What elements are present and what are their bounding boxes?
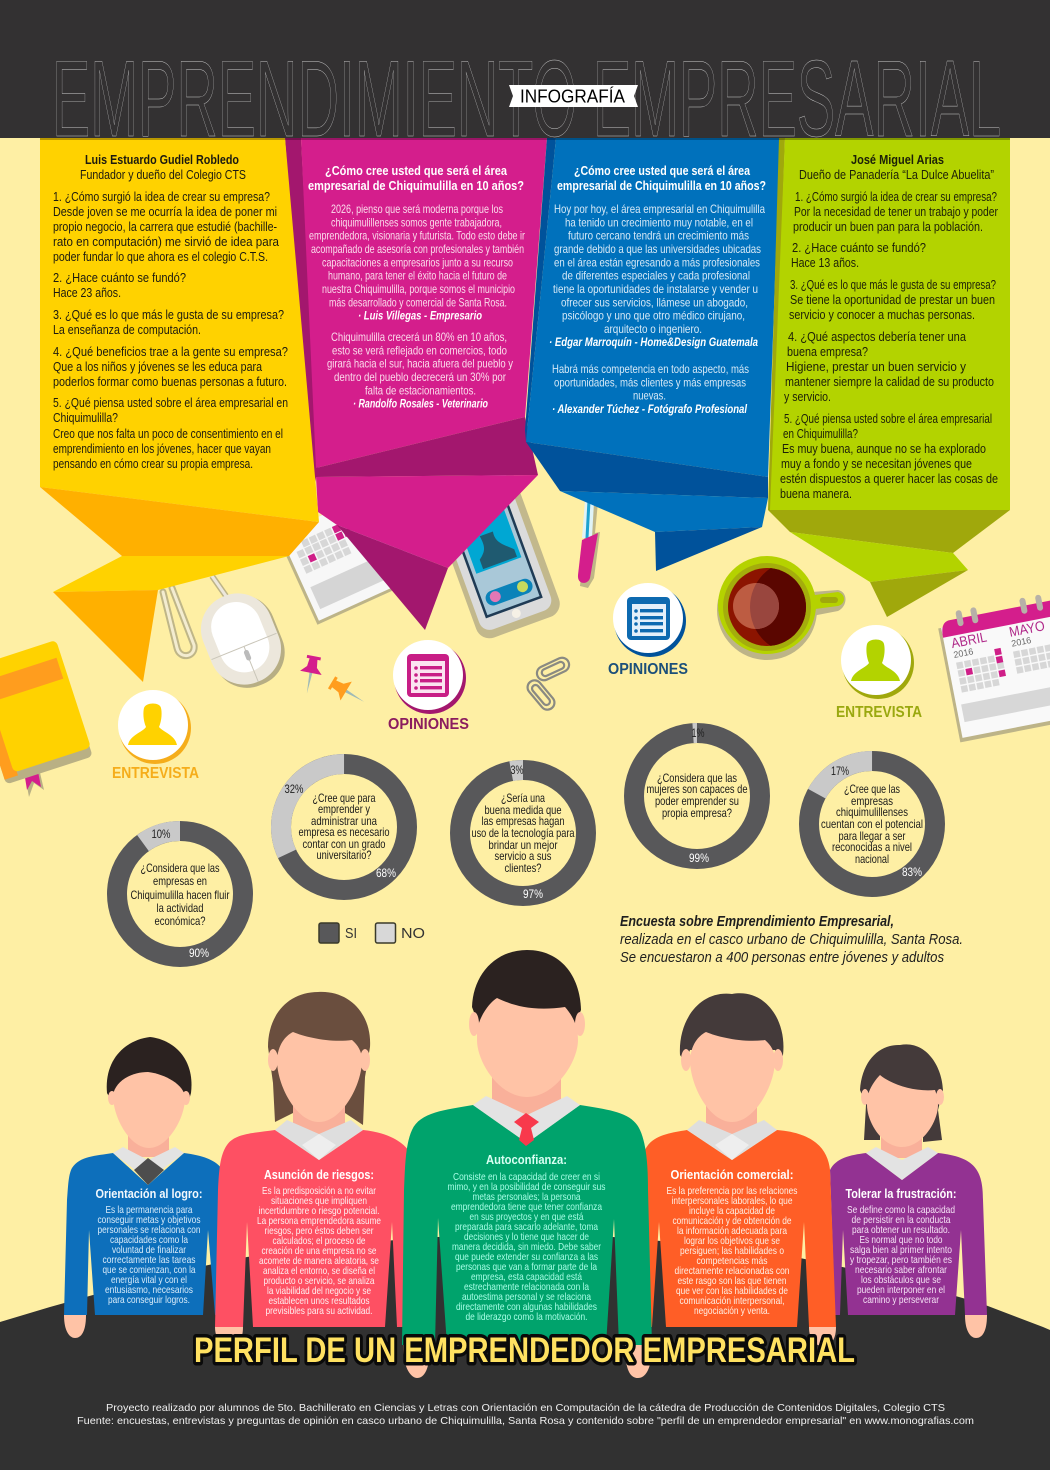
text: magenta opinions: ¿Cómo cree usted que será el área <box>325 163 508 178</box>
text: autoconfianza: estrechamente relacionada con la <box>464 1281 589 1293</box>
text: autoconfianza: en sus proyectos y en que está <box>470 1211 584 1223</box>
text: orientación comercial: competencias más <box>696 1255 768 1267</box>
text: tolerar la frustración: Se define como la capacidad <box>847 1204 955 1216</box>
text: orientación al logro: entusiasmo, necesarios <box>105 1284 193 1296</box>
donut chart: actividad económica: 90% <box>189 946 209 960</box>
text: magenta opinions: nuestra Chiquimulilla, porque somos el municipio <box>322 282 515 296</box>
text: autoconfianza: de liderazgo como la motivación. <box>466 1311 588 1323</box>
text: yellow interview: 3. ¿Qué es lo que más le gusta de su empresa? <box>53 308 284 322</box>
text: asunción de riesgos: La persona emprendedora asume <box>257 1215 381 1227</box>
text: green interview: muy a fondo y se necesitan jóvenes que <box>781 457 972 471</box>
icon: orange pin <box>326 673 370 711</box>
person: purple, tolerar la frustración <box>830 1044 987 1338</box>
donut chart: tecnología: buena medida que <box>484 803 562 817</box>
text: yellow interview: poderlos formar como buenas personas a futuro. <box>53 375 287 389</box>
text: magenta opinions: emprendedora, visionaria y futurista. Todo esto debe ir <box>309 229 525 243</box>
label: entrevista yellow: ENTREVISTA <box>112 765 199 782</box>
donut chart: actividad económica: económica? <box>154 914 206 928</box>
text: magenta opinions: girará hacia el sur, hacia afuera del pueblo y <box>327 357 513 371</box>
icon: notebook <box>0 640 94 797</box>
label: ABRIL: ABRIL <box>950 628 988 651</box>
icon: mouse <box>190 576 295 699</box>
donut chart: empresas chiquimulillenses: para llegar a ser <box>838 829 906 843</box>
text: green interview: 5. ¿Qué piensa usted sobre el área empresarial <box>784 412 992 426</box>
icon: opiniones magenta <box>388 640 469 733</box>
donut chart: grado universitario: universitario? <box>316 848 372 862</box>
donut chart: tecnología: clientes? <box>504 861 542 875</box>
icon: paperclips <box>525 655 571 713</box>
icon: pen <box>578 500 600 588</box>
donut chart: actividad económica: la actividad <box>156 901 204 915</box>
text: green interview: servicio y conocer a muchas personas. <box>789 308 975 322</box>
text: tolerar la frustración: necesario saber afrontar <box>855 1264 947 1276</box>
label: year: 2016 <box>953 646 974 660</box>
text: blue opinions <box>549 163 766 416</box>
text: tolerar la frustración: Es normal que no todo <box>860 1234 943 1246</box>
text: magenta opinions: empresarial de Chiquimulilla en 10 años? <box>308 178 524 193</box>
text: autoconfianza: metas personales; la persona <box>472 1191 581 1203</box>
footer credits: Fuente: encuestas, entrevistas y preguntas de opinión en casco urbano de Chiquimulilla, Santa Rosa y contenido sobre "perfil de un emprendedor empresarial" en www.monografias.com <box>77 1415 974 1427</box>
footer credits <box>77 1402 974 1427</box>
text: magenta opinions: · Luis Villegas - Empresario <box>358 309 482 323</box>
donut chart: tecnología: 3% <box>510 763 524 777</box>
text: green interview: Se tiene la oportunidad de prestar un buen <box>790 293 995 307</box>
text: asunción de riesgos: situaciones que impliquen <box>271 1195 367 1207</box>
text: yellow interview: 4. ¿Qué beneficios trae a la gente su empresa? <box>53 345 288 359</box>
text: green interview: 1. ¿Cómo surgió la idea de crear su empresa? <box>795 190 997 204</box>
text: blue opinions: empresarial de Chiquimulilla en 10 años? <box>557 178 766 193</box>
text: asunción de riesgos: incertidumbre o riesgo potencial. <box>258 1205 380 1217</box>
text: magenta opinions: falta de estacionamientos. <box>365 383 476 397</box>
text: blue opinions: psicólogo y uno que otro médico cirujano, <box>562 309 745 323</box>
text: blue opinions: arquitecto o ingeniero. <box>604 322 702 336</box>
donut chart: empresas chiquimulillenses <box>786 738 958 910</box>
text: green interview: 4. ¿Qué aspectos debería tener una <box>788 330 966 344</box>
text: magenta opinions: más desarrollado y comercial de Santa Rosa. <box>329 295 507 309</box>
text: blue opinions: nuevas. <box>633 389 666 403</box>
text: yellow interview: La enseñanza de computación. <box>53 323 201 337</box>
donut chart: mujeres: ¿Considera que las <box>657 771 737 785</box>
text: orientación comercial: negociación y venta. <box>694 1305 770 1317</box>
text: green interview: en Chiquimulilla? <box>783 427 858 441</box>
person: green, autoconfianza <box>402 950 652 1378</box>
text: autoconfianza: autoestima personal y se relaciona <box>462 1291 591 1303</box>
text: yellow interview <box>53 153 288 471</box>
text: orientación al logro: voluntad de finalizar <box>112 1244 186 1256</box>
text: orientación comercial: directamente relacionadas con <box>674 1265 790 1277</box>
text: asunción de riesgos: calculados; el proceso de <box>272 1235 366 1247</box>
text: asunción de riesgos: Es la predisposición a no evitar <box>262 1185 376 1197</box>
icon: coffee cup <box>717 556 846 660</box>
text: asunción de riesgos: producto o servicio, se analiza <box>264 1275 375 1287</box>
text: green interview: Dueño de Panadería “La Dulce Abuelita” <box>799 168 994 182</box>
survey note: Encuesta sobre Emprendimiento Empresarial, <box>620 913 894 930</box>
text: magenta opinions: esto se verá reflejado en comercios, todo <box>332 343 507 357</box>
text: magenta opinions: 2026, pienso que será moderna porque los <box>331 202 503 216</box>
donut chart: actividad económica: empresas en <box>153 874 207 888</box>
donut chart: grado universitario: administrar una <box>311 814 377 828</box>
legend: NO <box>401 925 425 942</box>
text: green interview: estén dispuestos a querer hacer las cosas de <box>780 472 998 486</box>
text: orientación comercial: interpersonales laborales, lo que <box>672 1195 793 1207</box>
text: green interview: Hace 13 años. <box>791 256 859 270</box>
text: orientación comercial: la información adecuada para <box>677 1225 787 1237</box>
donut chart: tecnología: las empresas hagan <box>482 814 564 828</box>
text: yellow interview: Fundador y dueño del Colegio CTS <box>80 168 246 182</box>
text: blue opinions: ha tenido un crecimiento muy notable, en el <box>565 215 753 229</box>
text: magenta opinions: capacitaciones a empresarios junto a su recurso <box>322 255 513 269</box>
label: year: 2016 <box>1011 635 1032 649</box>
donut chart: mujeres: poder emprender su <box>655 794 739 808</box>
ribbon: infografía: INFOGRAFÍA <box>520 86 626 106</box>
text: autoconfianza: empresa, esta capacidad está <box>471 1271 582 1283</box>
text: magenta opinions: dentro del pueblo decrecerá un 30% por <box>334 370 506 384</box>
text: tolerar la frustración: Tolerar la frustración: <box>846 1186 956 1201</box>
text: yellow interview: propio negocio, la carrera que estudié (bachille- <box>53 220 277 234</box>
dark footer ground <box>0 1232 1050 1470</box>
text: green interview: mantener siempre la calidad de su producto <box>785 375 994 389</box>
text: asunción de riesgos: analiza el entorno, se diseña el <box>263 1265 375 1277</box>
donut chart: grado universitario <box>260 743 428 911</box>
text: green interview: 3. ¿Qué es lo que más le gusta de su empresa? <box>790 278 996 292</box>
donut chart: grado universitario: contar con un grado <box>302 837 386 851</box>
donut chart: empresas chiquimulillenses: nacional <box>855 852 889 866</box>
donut chart: grado universitario: 32% <box>284 782 304 796</box>
text: autoconfianza: que puede extender su confianza a las <box>455 1251 598 1263</box>
text: asunción de riesgos: riesgos, pero éstos deben ser <box>264 1225 374 1237</box>
text: blue opinions: Habrá más competencia en todo aspecto, más <box>552 362 749 376</box>
label: entrevista green: ENTREVISTA <box>836 704 922 721</box>
text: green interview <box>780 153 998 501</box>
icon: entrevista green <box>836 625 922 721</box>
text: autoconfianza: emprendedora tiene que tener confianza <box>451 1201 602 1213</box>
text: yellow interview: Creo que nos falta un poco de consentimiento en el <box>53 427 283 441</box>
donut chart: empresas chiquimulillenses: chiquimulillenses <box>836 805 908 819</box>
text: blue opinions: oportunidades, más clientes y más empresas <box>554 375 746 389</box>
text: magenta opinions: chiquimulillenses somos gente trabajadora, <box>331 215 502 229</box>
text: magenta opinions: Chiquimulilla crecerá un 80% en 10 años, <box>331 330 507 344</box>
donut chart: actividad económica <box>92 806 268 982</box>
text: green interview: José Miguel Arias <box>851 153 944 167</box>
donut chart: tecnología: ¿Sería una <box>501 791 545 805</box>
text: magenta opinions: · Randolfo Rosales - Veterinario <box>353 397 488 411</box>
text: tolerar la frustración: de persistir en la conducta <box>852 1214 951 1226</box>
donut chart: tecnología: 97% <box>523 887 543 901</box>
donut chart: mujeres: mujeres son capaces de <box>646 782 748 796</box>
text: orientación al logro: conseguir metas y objetivos <box>98 1214 200 1226</box>
text: asunción de riesgos <box>257 1167 381 1317</box>
text: blue opinions: · Edgar Marroquín - Home&Design Guatemala <box>549 335 758 349</box>
donut chart: tecnología: uso de la tecnología para <box>472 826 575 840</box>
text: yellow interview: pensando en cómo crear su propia empresa. <box>53 457 253 471</box>
text: orientación comercial: que ver con las habilidades de <box>676 1285 788 1297</box>
text: orientación comercial: Orientación comercial: <box>670 1167 794 1182</box>
text: blue opinions: Hoy por hoy, el área empresarial en Chiquimulilla <box>554 202 765 216</box>
panel: blue opinions banner <box>525 138 780 571</box>
text: green interview: buena manera. <box>780 487 852 501</box>
text: tolerar la frustración: para obtener un resultado. <box>852 1224 950 1236</box>
text: orientación comercial: incluye la capacidad de <box>689 1205 775 1217</box>
text: tolerar la frustración: salga bien al primer intento <box>850 1244 952 1256</box>
text: orientación al logro: energía vital y con el <box>111 1274 187 1286</box>
text: asunción de riesgos: acomete de manera aleatoria, se <box>259 1255 379 1267</box>
text: yellow interview: Desde joven se me ocurría la idea de poner mi <box>53 205 277 219</box>
donut chart: mujeres <box>630 726 764 865</box>
text: orientación comercial <box>666 1167 798 1317</box>
text: orientación al logro: Orientación al logro: <box>96 1186 202 1201</box>
icon: magenta pin <box>296 654 325 696</box>
text: yellow interview: Que a los niños y jóvenes se les educa para <box>53 360 262 374</box>
donut chart: empresas chiquimulillenses: cuentan con el potencial <box>821 817 923 831</box>
text: green interview: 2. ¿Hace cuánto se fundó? <box>792 241 926 255</box>
text: green interview: Higiene, prestar un buen servicio y <box>786 360 967 374</box>
text: tolerar la frustración <box>846 1186 956 1306</box>
text: yellow interview: rato en computación) me sirvió de idea para <box>53 235 279 249</box>
text: yellow interview: poder fundar lo que ahora es el colegio C.T.S. <box>53 250 268 264</box>
donut chart: actividad económica: 10% <box>152 827 171 841</box>
text: green interview: Por la necesidad de tener un trabajo y poder <box>794 205 998 219</box>
text: blue opinions: tiene la oportunidades de instalarse y vender u <box>553 282 758 296</box>
legend <box>319 923 425 943</box>
donut chart: empresas chiquimulillenses: empresas <box>851 794 893 808</box>
text: orientación al logro: para conseguir logros. <box>108 1294 190 1306</box>
icon: paperclip <box>163 588 194 656</box>
text: autoconfianza: directamente con algunas habilidades <box>456 1301 597 1313</box>
survey note <box>620 913 963 966</box>
donut chart: actividad económica: ¿Considera que las <box>140 861 220 875</box>
text: blue opinions: de diferentes especiales y cada profesional <box>562 269 750 283</box>
person: blue, orientación al logro <box>64 1037 235 1338</box>
icon: phone <box>427 464 564 642</box>
text: blue opinions: grande debido a que las universidades ubicadas <box>554 242 761 256</box>
text: green interview: buena empresa? <box>787 345 868 359</box>
text: orientación al logro: que se comienzan, con la <box>102 1264 196 1276</box>
text: autoconfianza: Consiste en la capacidad de creer en si <box>453 1171 600 1183</box>
text: orientación al logro: correctamente las tareas <box>102 1254 196 1266</box>
donut chart: actividad económica: Chiquimulilla hacen fluir <box>130 888 230 902</box>
text: tolerar la frustración: los obstáculos que se <box>861 1274 941 1286</box>
donut chart: grado universitario: 68% <box>376 866 396 880</box>
donut chart: tecnología <box>449 759 597 907</box>
donut chart: grado universitario: empresa es necesario <box>298 825 390 839</box>
footer credits: Proyecto realizado por alumnos de 5to. Bachillerato en Ciencias y Letras con Orientación en Computación de la cátedra de Producción de Contenidos Digitales, Colegio CTS <box>106 1402 945 1414</box>
heading: perfil de un emprendedor empresarial: PERFIL DE UN EMPRENDEDOR EMPRESARIAL <box>194 1331 855 1370</box>
label: opiniones blue: OPINIONES <box>608 661 688 678</box>
donut chart: empresas chiquimulillenses: reconocidas a nivel <box>832 840 912 854</box>
label: opiniones magenta: OPINIONES <box>388 716 469 733</box>
donut chart: empresas chiquimulillenses: 83% <box>902 865 922 879</box>
panel: green interview banner <box>768 138 1010 617</box>
donut chart: mujeres: propia empresa? <box>662 806 732 820</box>
text: yellow interview: emprendimiento en los jóvenes, hacer que vayan <box>53 442 271 456</box>
donut chart: grado universitario: ¿Cree que para <box>312 791 376 805</box>
text: magenta opinions: humano, para tener el éxito hacia el futuro de <box>328 269 507 283</box>
text: magenta opinions: acompañado de asesoría con profesionales y también <box>311 242 524 256</box>
text: blue opinions: ¿Cómo cree usted que será el área <box>574 163 751 178</box>
text: orientación al logro: Es la permanencia para <box>106 1204 193 1216</box>
text: autoconfianza: decisiones y lo tiene que hacer de <box>464 1231 589 1243</box>
text: tolerar la frustración: camino y perseverar <box>863 1294 939 1306</box>
text: orientación comercial: comunicación y de obtención de <box>672 1215 792 1227</box>
text: orientación comercial: lograr los objetivos que se <box>684 1235 780 1247</box>
text: blue opinions: en el área están egresando a más profesionales <box>554 255 760 269</box>
donut chart: empresas chiquimulillenses: 17% <box>831 764 849 778</box>
icon: opiniones blue <box>608 583 688 678</box>
text: orientación comercial: Es la preferencia por las relaciones <box>666 1185 798 1197</box>
icon: wall calendar <box>936 588 1050 742</box>
text: yellow interview: 5. ¿Qué piensa usted sobre el área empresarial en <box>53 396 288 410</box>
text: green interview: y servicio. <box>784 390 831 404</box>
donut chart: grado universitario: emprender y <box>318 802 370 816</box>
person: red, asunción de riesgos <box>215 992 425 1346</box>
text: blue opinions: ofrecer sus servicios, llámese un abogado, <box>561 295 748 309</box>
panel: magenta opinions banner <box>285 138 547 630</box>
icon: entrevista yellow <box>112 690 199 782</box>
text: green interview: Es muy buena, aunque no se ha explorado <box>782 442 986 456</box>
person: orange, orientación comercial <box>640 993 836 1346</box>
text: autoconfianza: mimo, y en la posibilidad de conseguir sus <box>448 1181 606 1193</box>
text: orientación al logro: capacidades como la <box>110 1234 188 1246</box>
legend: SI <box>345 925 357 942</box>
text: asunción de riesgos: establecen unos resultados <box>268 1295 370 1307</box>
text: orientación comercial: persiguen; las habilidades o <box>680 1245 784 1257</box>
survey note: realizada en el casco urbano de Chiquimulilla, Santa Rosa. <box>620 931 963 948</box>
text: autoconfianza: preparada para sacarlo adelante, toma <box>455 1221 598 1233</box>
text: autoconfianza: manera decidida, sin miedo. Debe saber <box>452 1241 601 1253</box>
text: orientación al logro: personales se relaciona con <box>98 1224 201 1236</box>
donut chart: mujeres: 1% <box>692 726 705 740</box>
label: MAYO: MAYO <box>1008 617 1046 640</box>
text: tolerar la frustración: pueden interponer en el <box>857 1284 945 1296</box>
text: orientación al logro <box>96 1186 202 1306</box>
text: asunción de riesgos: previsibles para su actividad. <box>266 1305 372 1317</box>
text: asunción de riesgos: Asunción de riesgos: <box>264 1167 374 1182</box>
text: blue opinions: futuro cercano tendrá un crecimiento más <box>568 229 749 243</box>
text: autoconfianza: personas que van a formar parte de la <box>456 1261 597 1273</box>
donut chart: tecnología: brindar un mejor <box>488 838 558 852</box>
text: yellow interview: Luis Estuardo Gudiel Robledo <box>85 153 239 167</box>
text: magenta opinions <box>308 163 525 411</box>
text: asunción de riesgos: la viabilidad del negocio y se <box>267 1285 371 1297</box>
text: yellow interview: 1. ¿Cómo surgió la idea de crear su empresa? <box>53 190 270 204</box>
survey note: Se encuestaron a 400 personas entre jóvenes y adultos <box>620 949 944 966</box>
icon: small calendar sheet <box>277 483 434 625</box>
text: green interview: producir un buen pan para la población. <box>793 220 983 234</box>
text: yellow interview: 2. ¿Hace cuánto se fundó? <box>53 271 186 285</box>
text: orientación comercial: este rasgo son las que tienen <box>678 1275 787 1287</box>
text: yellow interview: Hace 23 años. <box>53 286 121 300</box>
text: tolerar la frustración: y tropezar, pero también es <box>850 1254 952 1266</box>
text: autoconfianza: Autoconfianza: <box>486 1152 567 1167</box>
text: autoconfianza <box>448 1152 606 1323</box>
donut chart: mujeres: 99% <box>689 851 709 865</box>
panel: yellow interview banner <box>40 138 319 682</box>
text: orientación comercial: comunicación interpersonal, <box>680 1295 784 1307</box>
donut chart: tecnología: servicio a sus <box>494 849 552 863</box>
header band <box>0 0 1050 138</box>
text: asunción de riesgos: creación de una empresa no se <box>262 1245 377 1257</box>
text: blue opinions: · Alexander Túchez - Fotógrafo Profesional <box>552 402 748 416</box>
text: yellow interview: Chiquimulilla? <box>53 411 118 425</box>
donut chart: empresas chiquimulillenses: ¿Cree que las <box>844 782 900 796</box>
